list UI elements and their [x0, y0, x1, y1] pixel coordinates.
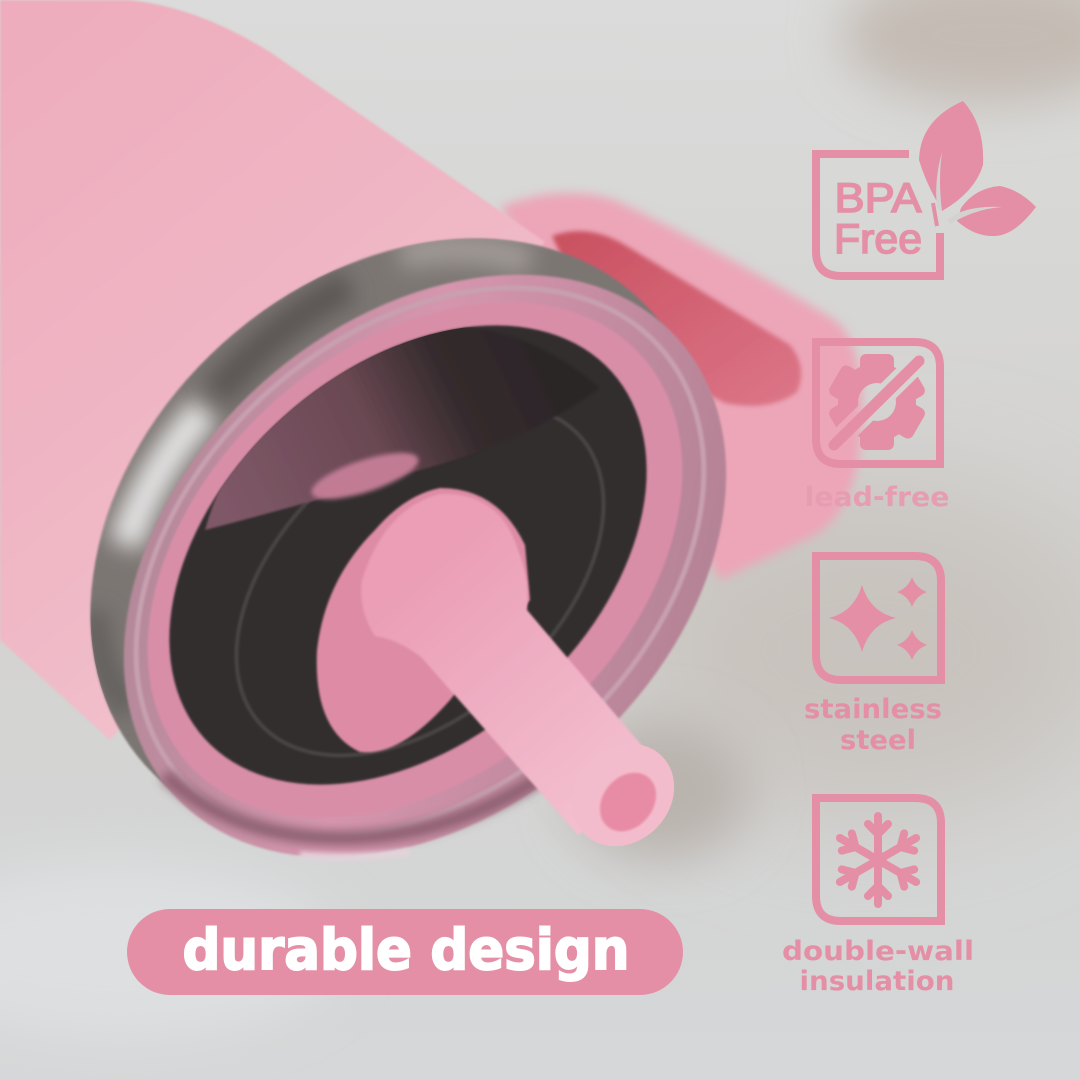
- badge outline: [816, 154, 940, 276]
- icon: stainless steel sparkle: [816, 556, 941, 680]
- label: stainless steel: [804, 694, 942, 756]
- clear lid rim: [8, 156, 842, 976]
- snowflake: [835, 816, 921, 904]
- handle opening: [552, 231, 801, 406]
- small sparkle top: [897, 577, 927, 607]
- silicone straw: [317, 488, 695, 867]
- big leaf: [919, 101, 983, 211]
- rim bottom streak: [165, 765, 560, 838]
- badge outline: [816, 556, 941, 680]
- straw hole: [588, 761, 668, 843]
- bottle body: [0, 0, 545, 740]
- small leaf: [947, 186, 1036, 236]
- icon: BPA free with leaves: [816, 101, 1036, 276]
- inner pink seat: [46, 198, 784, 922]
- reflected straw highlight: [307, 443, 423, 509]
- metal ring: [0, 116, 826, 960]
- label: stainless steel: steel: [840, 725, 916, 756]
- icon: double-wall snowflake: [816, 798, 941, 921]
- small sparkle bottom: [897, 630, 927, 660]
- caption text: durable design: [182, 918, 630, 983]
- straw tube: [361, 494, 670, 835]
- straw mouth: [551, 723, 695, 867]
- badge outline: [816, 798, 941, 921]
- dark interior: [80, 233, 736, 877]
- bottle handle: [500, 193, 862, 580]
- BPA free text: [834, 174, 922, 262]
- badge outline: [816, 342, 940, 464]
- reflection: [205, 326, 600, 530]
- label: double-wall insulation: double-wall: [782, 936, 974, 967]
- BPA free text: BPA: [834, 174, 922, 221]
- stem: [933, 203, 937, 226]
- large sparkle: [829, 585, 896, 652]
- label: double-wall insulation: [782, 936, 974, 997]
- straw base: [317, 488, 530, 752]
- BPA free text: Free: [834, 215, 922, 262]
- caption pill: [127, 909, 683, 995]
- crossed gear: [827, 354, 927, 450]
- rim bottom highlight: [300, 852, 410, 857]
- label: double-wall insulation: insulation: [800, 966, 954, 997]
- icon: lead free gear: [816, 342, 940, 464]
- label: stainless steel: stainless: [804, 694, 942, 725]
- bottle lid: [89, 237, 728, 860]
- slash: [834, 361, 919, 445]
- ring shading: [95, 249, 530, 710]
- label: lead-free: lead-free: [804, 482, 950, 513]
